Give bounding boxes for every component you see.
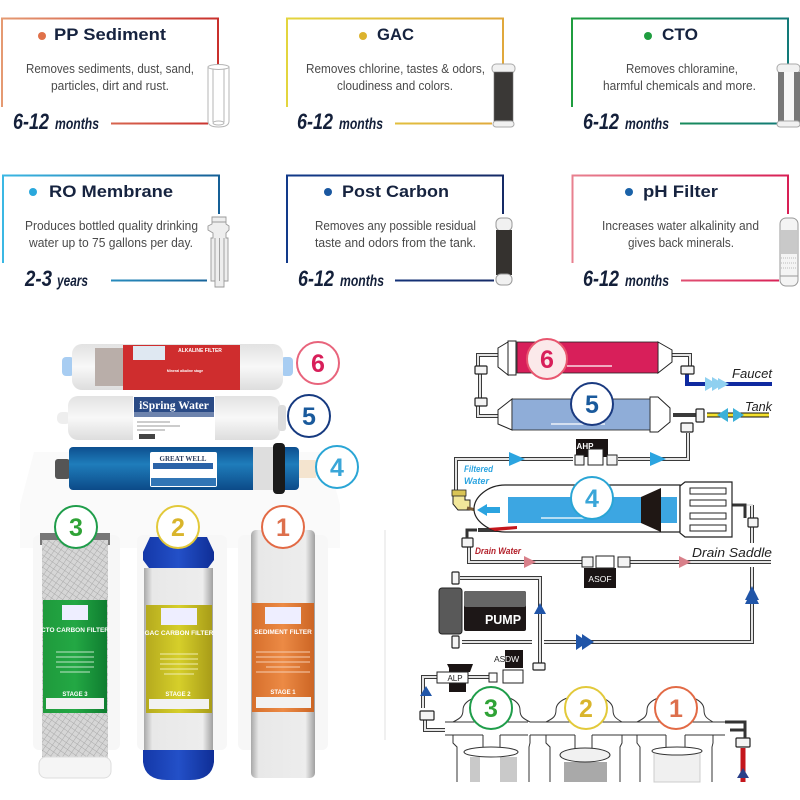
- lifespan: years: [56, 273, 88, 290]
- ASDW valve: AS: [494, 654, 506, 664]
- label: Filtered Water: Water: [464, 476, 489, 486]
- heading: RO Membrane: [49, 182, 173, 201]
- card frame: [287, 18, 503, 124]
- badge 2: [157, 506, 199, 548]
- card frame: [572, 176, 788, 280]
- pump: PUMP: [485, 613, 521, 627]
- label: Drain Saddle: Drain Saddle: [692, 545, 772, 560]
- badge 5: [288, 395, 330, 437]
- badge 4: [316, 446, 358, 488]
- panel: water flow diagram: [420, 339, 773, 782]
- stage 5 filter: [498, 397, 670, 432]
- CTO filter 3: CTO CARBON FILTER: [41, 627, 109, 634]
- sediment filter 1: SEDIMENT FILTER: [254, 629, 312, 636]
- icon: RO membrane cartridge: [208, 217, 229, 287]
- GAC filter 2: GAC CARBON FILTER: [145, 630, 214, 637]
- lifespan: 2-3: [24, 266, 52, 291]
- badge 5: 5: [585, 391, 599, 419]
- card frame: [287, 176, 503, 280]
- card frame: [2, 18, 218, 124]
- badge 3: 3: [69, 514, 83, 542]
- GAC filter 2: STAGE 2: [165, 692, 191, 698]
- badge 6: 6: [540, 346, 554, 374]
- panel: Post Carbon: [287, 176, 512, 291]
- label: Drain Water: Drain Water: [475, 546, 521, 556]
- flow arrows: [420, 377, 759, 696]
- panel: PP Sediment: [2, 18, 229, 134]
- panel: CTO: [572, 18, 800, 134]
- badge 4: 4: [585, 485, 599, 513]
- icon: GAC cartridge: [492, 64, 515, 127]
- lifespan: 6-12: [13, 109, 50, 134]
- description: taste and odors from the tank.: [315, 236, 476, 250]
- heading: GAC: [377, 25, 414, 44]
- alkaline filter 6: ALKALINE FILTER: [178, 348, 222, 354]
- badge 1: [655, 687, 697, 729]
- lifespan: 6-12: [583, 109, 620, 134]
- icon: post carbon cartridge: [496, 218, 512, 285]
- label: Faucet: Faucet: [732, 366, 773, 381]
- lifespan: months: [340, 273, 384, 290]
- badge 3: [470, 687, 512, 729]
- mounting bracket: [20, 452, 340, 548]
- sediment filter 1: [251, 530, 315, 778]
- lifespan: months: [625, 116, 669, 133]
- badge 2: [565, 687, 607, 729]
- description: particles, dirt and rust.: [51, 79, 169, 93]
- badge 1: 1: [276, 514, 290, 542]
- badge 4: [571, 477, 613, 519]
- badge 6: 6: [311, 350, 325, 378]
- fittings: [420, 366, 758, 747]
- badge 5: [571, 383, 613, 425]
- AHP valve: [575, 439, 617, 465]
- lifespan: months: [339, 116, 383, 133]
- heading: Post Carbon: [342, 182, 449, 201]
- inlet line: [737, 748, 749, 782]
- description: Increases water alkalinity and: [602, 219, 759, 233]
- bullet: [644, 32, 652, 40]
- ASOF valve: [582, 556, 630, 588]
- badge 3: 3: [484, 695, 498, 723]
- panel: pH Filter: [572, 176, 798, 291]
- icon: clear sediment cartridge: [208, 64, 229, 127]
- alkaline filter 6: Mineral alkaline stage: [167, 369, 203, 373]
- badge 6: [297, 342, 339, 384]
- tank line: [707, 412, 769, 418]
- bullet: [359, 32, 367, 40]
- badge 5: 5: [302, 403, 316, 431]
- icon: pH cartridge: [780, 218, 798, 286]
- description: Produces bottled quality drinking: [25, 219, 198, 233]
- alkaline filter 6: [62, 344, 293, 390]
- AHP valve: AHP: [577, 442, 594, 451]
- pump: [439, 588, 526, 634]
- description: cloudiness and colors.: [337, 79, 453, 93]
- ASOF valve: ASOF: [588, 574, 612, 584]
- ALP valve: [437, 664, 497, 692]
- label: Filtered Water: Filtered: [464, 464, 493, 474]
- description: harmful chemicals and more.: [603, 79, 756, 93]
- lifespan: 6-12: [298, 266, 335, 291]
- bullet: [29, 188, 37, 196]
- icon: CTO cartridge: [777, 64, 800, 127]
- bullet: [324, 188, 332, 196]
- panel: RO Membrane: [3, 176, 229, 291]
- stage 6 filter: [498, 341, 672, 375]
- label: Tank: Tank: [745, 399, 773, 414]
- heading: pH Filter: [643, 182, 718, 201]
- badge 4: 4: [330, 454, 344, 482]
- ASDW valve: [494, 650, 523, 683]
- panel: filter system photo: [20, 342, 358, 780]
- post carbon filter 5: [57, 396, 286, 440]
- description: gives back minerals.: [628, 236, 734, 250]
- sediment filter 1: STAGE 1: [270, 690, 296, 696]
- badge 6: [527, 339, 567, 379]
- post carbon filter 5: iSpring Water: [139, 400, 209, 412]
- lifespan: months: [55, 116, 99, 133]
- heading: CTO: [662, 25, 698, 44]
- faucet line: [687, 373, 772, 384]
- description: Removes any possible residual: [315, 219, 476, 233]
- ALP valve: ALP: [447, 674, 463, 683]
- card frame: [572, 18, 788, 124]
- description: water up to 75 gallons per day.: [28, 236, 193, 250]
- GAC filter 2: [143, 537, 214, 780]
- lifespan: months: [625, 273, 669, 290]
- stage 4 membrane housing: [474, 482, 732, 537]
- badge 1: [262, 506, 304, 548]
- bullet: [625, 188, 633, 196]
- description: Removes chloramine,: [626, 62, 738, 76]
- filter housings: [33, 535, 328, 750]
- pipes: [423, 355, 771, 730]
- description: Removes sediments, dust, sand,: [26, 62, 194, 76]
- lifespan: 6-12: [583, 266, 620, 291]
- panel: GAC: [287, 18, 515, 134]
- lifespan: 6-12: [297, 109, 334, 134]
- RO membrane 4: [55, 443, 316, 494]
- badge 2: 2: [171, 514, 185, 542]
- RO membrane 4: GREAT WELL: [160, 455, 207, 463]
- description: Removes chlorine, tastes & odors,: [306, 62, 485, 76]
- badge 2: 2: [579, 695, 593, 723]
- ASDW valve: DW: [505, 654, 519, 664]
- badge 1: 1: [669, 695, 683, 723]
- CTO filter 3: STAGE 3: [62, 692, 88, 698]
- bullet: [38, 32, 46, 40]
- filter heads and housings: [445, 695, 745, 782]
- badge 3: [55, 506, 97, 548]
- card frame: [3, 176, 219, 280]
- CTO filter 3: [39, 533, 111, 778]
- heading: PP Sediment: [54, 25, 166, 44]
